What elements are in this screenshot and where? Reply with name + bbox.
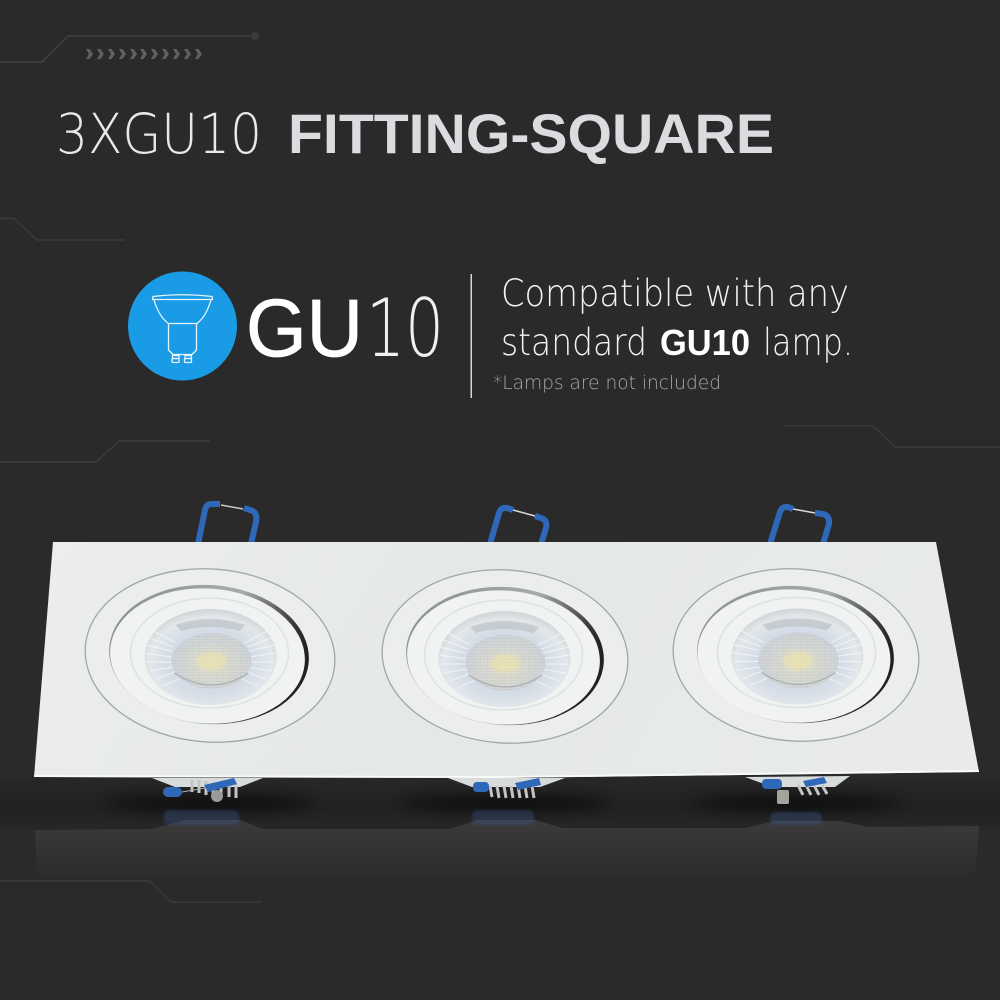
spring clip: middle (490, 508, 546, 544)
lower springs: middle (448, 778, 565, 798)
decorative circuit line: top left (0, 32, 259, 62)
title: 3XGU10 (56, 102, 262, 166)
compatibility text: Compatible with any (501, 272, 849, 315)
decorative circuit lines (0, 218, 1000, 902)
divider (470, 274, 472, 398)
lower springs: left (152, 778, 263, 802)
fitting: right (667, 561, 925, 749)
spring clip: right (770, 507, 829, 544)
lower springs: right (745, 776, 850, 804)
compatibility text (501, 272, 853, 364)
GU10 logotype: GU (246, 283, 363, 374)
icon: GU10 bulb in blue circle (128, 272, 237, 380)
plate (34, 542, 979, 778)
footnote: *Lamps are not included (493, 372, 721, 394)
title (56, 102, 774, 166)
floor shadow band (0, 777, 1000, 830)
fitting: left (79, 560, 341, 751)
compatibility text: standard (501, 321, 647, 364)
compatibility text: lamp. (763, 321, 853, 364)
spring clip: left (198, 504, 256, 544)
GU10 logotype: 10 (366, 282, 444, 375)
reflection of plate (35, 810, 979, 880)
compatibility text: GU10 (660, 322, 750, 363)
GU10 logotype (246, 282, 444, 375)
fitting: middle (376, 562, 634, 751)
title: FITTING-SQUARE (288, 102, 774, 165)
chevron row (86, 49, 202, 59)
